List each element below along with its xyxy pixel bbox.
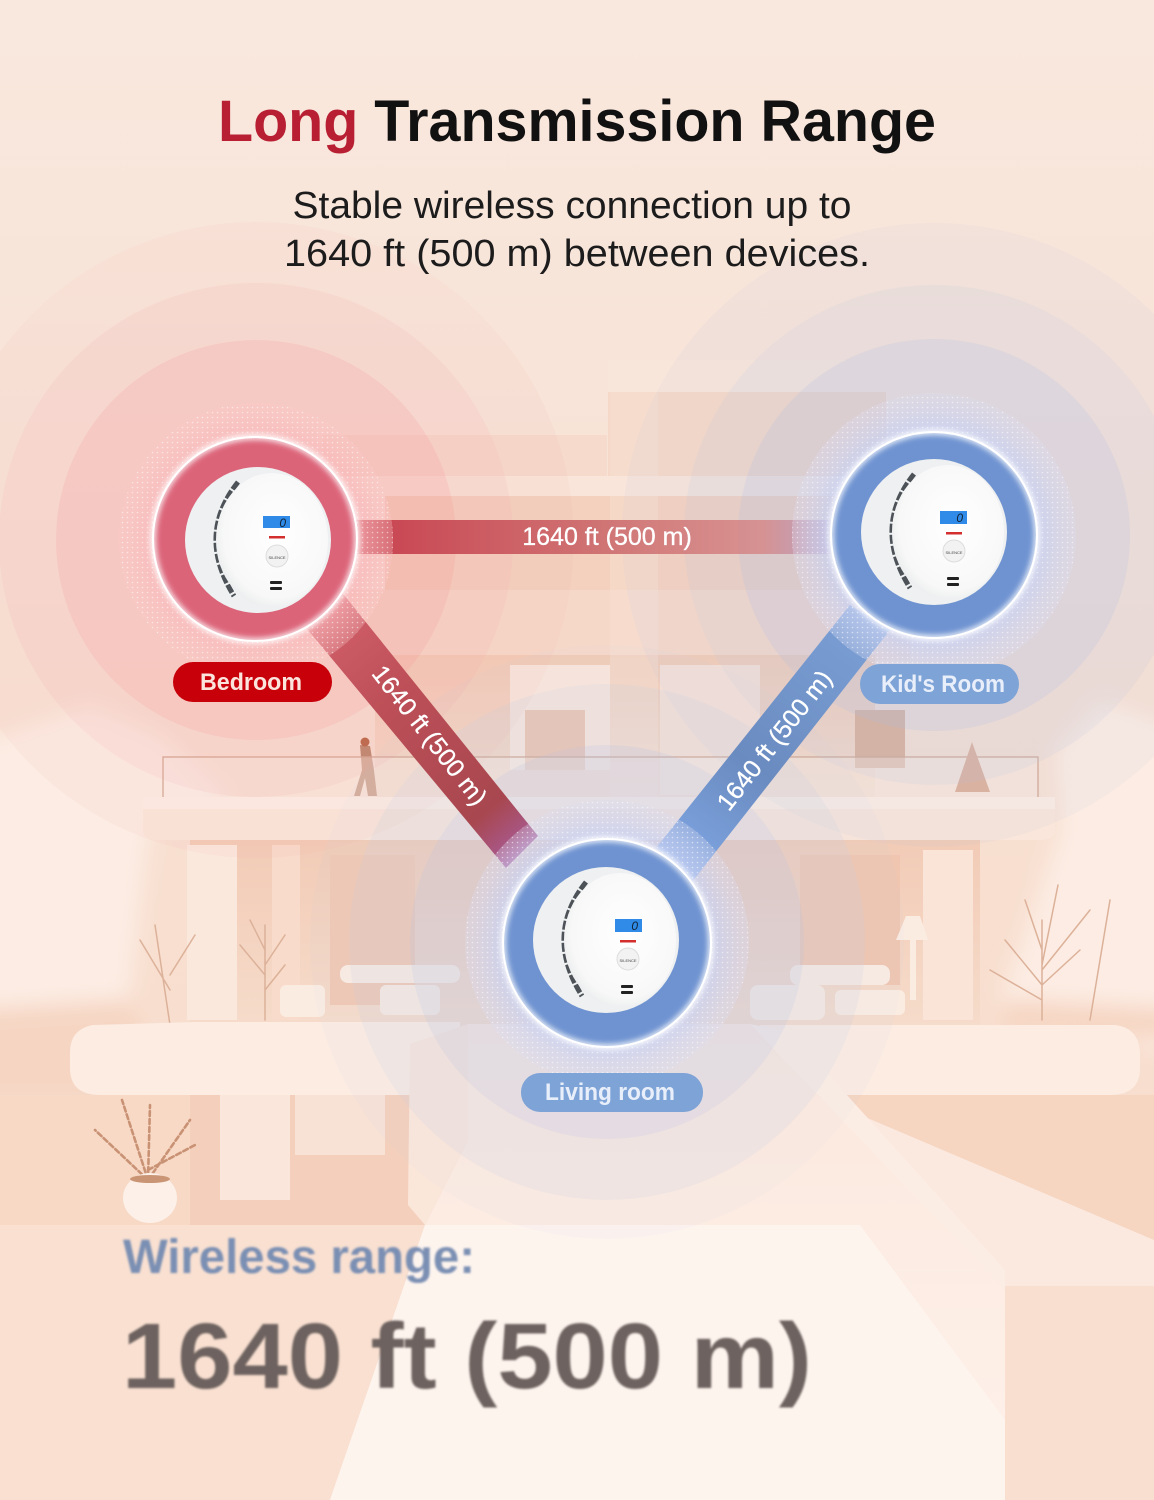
white stairs and path [330,1024,1005,1500]
room label: kid's room: Kid's Room [881,671,1005,698]
right wall and ledge [780,1095,1154,1240]
small pine [955,742,990,792]
smoke detector [185,467,331,613]
band label: horizontal: 1640 ft (500 m) [522,523,692,551]
balcony slab [143,797,1055,809]
house illustration [0,360,1154,1500]
room label: bedroom [173,662,332,702]
room label: bedroom: Bedroom [200,669,302,696]
lower-floor interior [190,840,980,1030]
connection band: bedroom to living room [298,590,538,868]
connection band: kid's room to living room [656,605,890,882]
upper roof [608,360,938,392]
signal circles: living room [310,645,904,1239]
detector node: bedroom [119,403,393,677]
smoke detector: 0 [279,516,286,530]
band label: kid's room to living room: 1640 ft (500 m) [712,665,838,816]
band label: bedroom to living room: 1640 ft (500 m) [366,660,492,811]
smoke detector: SILENCE [619,958,637,963]
trees on terrace [140,885,1110,1025]
signal circles: bedroom [0,222,574,858]
smoke detector [861,459,1007,605]
title: Long Transmission Range [218,89,936,154]
connection band: bedroom to kid's room [350,520,840,554]
room label: living room [521,1073,703,1112]
person [354,745,377,796]
mountains [0,700,1154,1100]
terrace [70,1022,460,1095]
ground level wall [0,1095,1154,1500]
artwork [855,710,905,768]
balcony glass rail [163,757,1038,798]
subtitle: 1640 ft (500 m) between devices. [284,233,870,275]
wireless range value: 1640 ft (500 m) [122,1304,812,1408]
wireless range label: Wireless range: [123,1231,475,1284]
signal circles: kid's room [622,223,1154,847]
subtitle: Stable wireless connection up to [292,185,852,227]
detector node: living room [465,800,749,1084]
pillars [187,845,237,1020]
smoke detector: SILENCE [268,555,286,560]
subtitle [284,185,870,275]
smoke detector: SILENCE [945,550,963,555]
smoke detector [533,867,679,1013]
room label: living room: Living room [545,1079,675,1106]
furniture [280,916,928,1020]
plant pot [95,1100,195,1223]
upper floor [385,496,845,661]
smoke detector: 0 [631,919,638,933]
room label: kid's room [860,664,1019,704]
smoke detector: 0 [956,511,963,525]
detector node: kid's room [792,393,1076,677]
